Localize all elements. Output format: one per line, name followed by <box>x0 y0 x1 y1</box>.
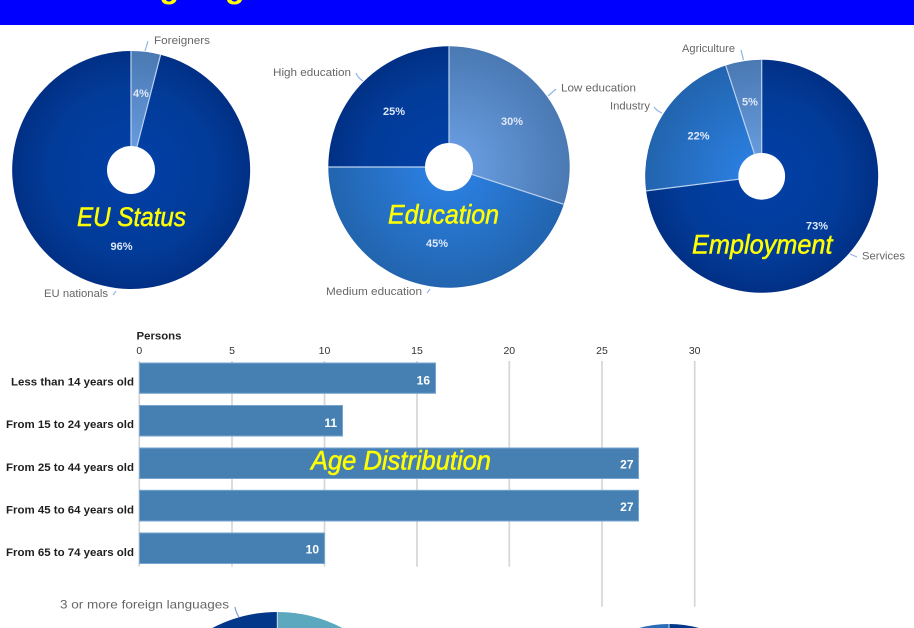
slice dividers <box>328 46 564 204</box>
title: Age Distribution: Age Distribution <box>309 446 491 476</box>
slice: Agriculture <box>726 60 762 176</box>
label: Services: Services <box>862 250 906 262</box>
label: Industry: Industry <box>610 100 650 112</box>
slice: EU nationals <box>12 51 250 289</box>
label: 3 or more foreign languages <box>60 598 239 617</box>
value: 73%: 73% <box>806 220 828 232</box>
bar: From 25 to 44 years old: 27 <box>620 458 634 472</box>
label: Agriculture <box>682 43 744 60</box>
label: Low education: Low education <box>561 82 636 94</box>
slice: right dark <box>669 624 699 628</box>
axis numbers: 5 <box>229 345 235 357</box>
axis numbers: 15 <box>411 345 423 357</box>
title: EU Status: EU Status <box>77 202 186 232</box>
pie chart: Employment <box>610 43 906 293</box>
pie chart: EU status <box>12 35 250 300</box>
axis numbers <box>136 345 701 357</box>
axis numbers: 0 <box>136 345 142 357</box>
value: 22%: 22% <box>687 130 710 142</box>
pie hole <box>738 153 785 200</box>
bar: From 25 to 44 years old <box>6 448 638 478</box>
slice: High education <box>328 46 449 167</box>
slice dividers <box>646 60 762 191</box>
value: 5%: 5% <box>742 96 758 108</box>
label: Medium education: Medium education <box>326 286 422 298</box>
pie chart: bottom right (cropped) <box>639 624 699 628</box>
label: High education: High education <box>273 67 351 79</box>
pie hole <box>425 143 473 191</box>
value: 96%: 96% <box>110 241 133 253</box>
bar: From 15 to 24 years old: From 15 to 24 years old <box>6 419 134 431</box>
bar: From 65 to 74 years old: 10 <box>306 542 319 556</box>
bar chart: age distribution <box>6 330 701 607</box>
axis numbers: 10 <box>319 345 330 357</box>
bar: From 25 to 44 years old: From 25 to 44 years old <box>6 462 134 474</box>
title: Education: Education <box>388 200 499 230</box>
bar: From 65 to 74 years old <box>6 533 324 564</box>
slice: Foreigners <box>131 51 161 170</box>
bar: From 15 to 24 years old <box>6 406 342 436</box>
label: Agriculture: Agriculture <box>682 43 735 55</box>
slice: right teal <box>277 612 342 628</box>
label: Foreigners <box>145 35 211 51</box>
axis numbers: 20 <box>503 345 515 357</box>
label: EU nationals: EU nationals <box>44 288 109 300</box>
bar: Less than 14 years old: 16 <box>417 374 430 388</box>
slice: Medium education <box>328 167 564 288</box>
slice: left dark <box>212 612 277 628</box>
value: 45%: 45% <box>426 238 448 250</box>
pie chart: Education <box>273 46 636 298</box>
axis numbers: 25 <box>596 345 608 357</box>
pie chart: foreign languages (cropped) <box>60 598 342 628</box>
value: 25%: 25% <box>383 106 405 118</box>
label: 3 or more foreign languages: 3 or more foreign languages <box>60 598 229 612</box>
pie hole <box>107 146 155 194</box>
slice: Low education <box>449 46 570 204</box>
label: High education <box>273 67 363 81</box>
bar: From 45 to 64 years old <box>6 490 638 521</box>
bar: From 15 to 24 years old: 11 <box>324 416 337 430</box>
axis numbers: 30 <box>689 345 701 357</box>
value: 30%: 30% <box>501 116 523 128</box>
title: Employment: Employment <box>692 229 834 259</box>
label: Foreigners: Foreigners <box>154 35 211 47</box>
bar: Less than 14 years old <box>11 363 436 393</box>
slice dividers <box>131 51 161 170</box>
value: 4%: 4% <box>133 88 149 100</box>
bar: Less than 14 years old: Less than 14 years old <box>11 376 134 388</box>
slice: Industry <box>645 66 762 191</box>
header banner with clipped title <box>0 0 914 25</box>
bar: From 45 to 64 years old: From 45 to 64 years old <box>6 504 134 516</box>
slice: left blue <box>639 624 669 628</box>
axis title: Persons <box>136 330 182 342</box>
bar: From 45 to 64 years old: 27 <box>620 500 634 514</box>
slice: Services <box>646 60 878 293</box>
bar: From 65 to 74 years old: From 65 to 74 years old <box>6 547 134 559</box>
